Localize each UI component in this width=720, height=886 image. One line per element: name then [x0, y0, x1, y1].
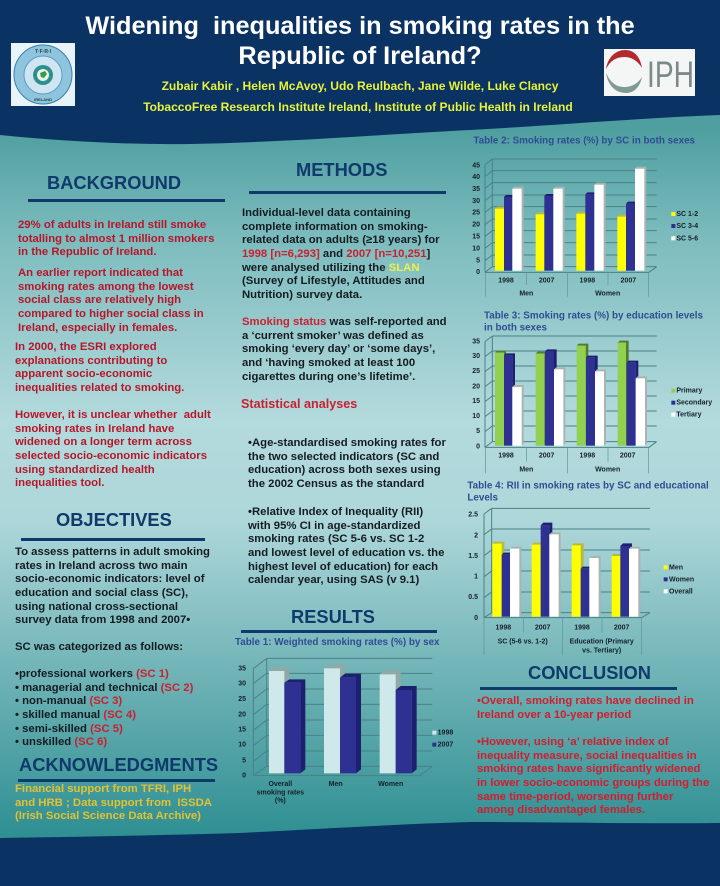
conclusion text: widened inequalities: same time-period, worsening further	[477, 791, 673, 803]
chart: table 1 weighted smoking rates by sex: 0	[242, 773, 246, 780]
chart: table 2 smoking rates by SC: 35	[472, 186, 480, 193]
chart: table 1 weighted smoking rates by sex: Women	[378, 781, 403, 788]
chart: table 2 smoking rates by SC: 25	[472, 210, 480, 217]
social class list	[15, 668, 193, 748]
chart: table 2 smoking rates by SC: 2007	[539, 278, 555, 285]
chart: table 1 weighted smoking rates by sex	[235, 637, 453, 805]
chart: table 2 smoking rates by SC: 5	[476, 257, 480, 264]
chart: table 4 RII in smoking rates: 2007	[614, 624, 630, 631]
chart: table 3 smoking rates by education: Table 3: Smoking rates (%) by education levels	[484, 311, 703, 322]
methods text: age-standardised: •Age-standardised smoking rates for	[248, 437, 446, 449]
chart: table 3 smoking rates by education: 1998	[498, 453, 514, 460]
affiliation: TobaccoFree Research Institute Ireland, Institute of Public Health in Ireland	[143, 100, 573, 114]
chart: table 4 RII in smoking rates: 1998	[496, 624, 511, 631]
title: Republic of Ireland?	[238, 42, 482, 70]
authors: Zubair Kabir , Helen McAvoy, Udo Reulbach, Jane Wilde, Luke Clancy	[162, 79, 558, 93]
chart: table 1 weighted smoking rates by sex: 20	[238, 711, 246, 718]
background text: research gap: widened on a longer term across	[15, 436, 192, 448]
chart: table 3 smoking rates by education: Tertiary	[676, 412, 702, 419]
chart: table 4 RII in smoking rates: Overall	[669, 588, 693, 595]
footer band	[0, 822, 720, 886]
logo: TFRI: T·F·R·I	[35, 49, 52, 55]
conclusion text: widened inequalities	[477, 736, 709, 816]
chart: table 3 smoking rates by education: Women	[595, 467, 620, 474]
methods text: data: Nutrition) survey data.	[242, 289, 362, 301]
social class intro: SC was categorized as follows:	[15, 641, 183, 653]
acknowledgments text: Financial support from TFRI, IPH	[15, 783, 191, 795]
chart: table 1 weighted smoking rates by sex: Men	[329, 781, 343, 788]
chart: table 2 smoking rates by SC	[472, 135, 698, 297]
conclusion text: widened inequalities: inequality measure, social inequalities in	[477, 750, 697, 762]
acknowledgments text: (Irish Social Science Data Archive)	[15, 810, 201, 822]
chart: table 2 smoking rates by SC: 1998	[498, 278, 514, 285]
panel: methods	[241, 159, 447, 586]
background text: earlier report: social class are relatively high	[18, 294, 181, 306]
heading: results: RESULTS	[291, 606, 375, 627]
methods text: relative index: and lowest level of education vs. the	[248, 547, 444, 559]
chart: table 2 smoking rates by SC: SC 5-6	[676, 235, 698, 242]
chart: table 2 smoking rates by SC: 45	[472, 162, 480, 169]
methods text: smoking status	[242, 316, 447, 383]
chart: table 4 RII in smoking rates: 2007	[535, 624, 551, 631]
methods text: age-standardised: education) across both sexes using	[248, 464, 441, 476]
methods text: smoking status: smoking ‘every day’ or ‘some days’,	[242, 343, 435, 355]
chart: table 2 smoking rates by SC: Table 2: Smoking rates (%) by SC in both sexes	[473, 135, 696, 146]
chart: table 1 weighted smoking rates by sex: 2007	[438, 742, 453, 749]
background text: ESRI: In 2000, the ESRI explored	[15, 341, 157, 353]
objectives text: using national cross-sectional	[15, 601, 178, 613]
panel: acknowledgments	[15, 754, 218, 822]
objectives text: education and social class (SC),	[15, 587, 188, 599]
objectives text: rates in Ireland across two main	[15, 560, 188, 572]
methods text: relative index: highest level of education) for each	[248, 561, 438, 573]
chart: table 1 weighted smoking rates by sex: smoking rates	[257, 789, 304, 796]
chart: table 3 smoking rates by education: 1998	[580, 453, 595, 460]
objectives text: To assess patterns in adult smoking	[15, 546, 210, 558]
heading: acknowledgments: ACKNOWLEDGMENTS	[19, 754, 218, 775]
methods text: data: (Survey of Lifestyle, Attitudes and	[242, 275, 425, 287]
chart: table 3 smoking rates by education: Men	[519, 467, 533, 474]
title	[85, 12, 635, 70]
background text: ESRI: inequalities related to smoking.	[15, 382, 184, 394]
chart: table 4 RII in smoking rates: Levels	[467, 493, 499, 504]
conclusion text: widened inequalities: in lower socio-economic groups during the	[477, 777, 709, 789]
conclusion text: widened inequalities: smoking rates have significantly widened	[477, 763, 700, 775]
background text: adults smoking: in the Republic of Ireland.	[18, 246, 156, 258]
chart: table 2 smoking rates by SC: SC 3-4	[676, 223, 698, 230]
panel: conclusion	[477, 662, 709, 816]
chart: table 1 weighted smoking rates by sex: 25	[238, 696, 246, 703]
methods text: relative index	[248, 506, 444, 586]
methods text: data: complete information on smoking-	[242, 221, 428, 233]
chart: table 3 smoking rates by education: 10	[472, 413, 480, 420]
chart: table 2 smoking rates by SC: SC 1-2	[676, 211, 698, 218]
methods text: smoking status: a ‘current smoker’ was defined as	[242, 330, 424, 342]
methods text: relative index: •Relative Index of Inequality (RII)	[248, 506, 423, 518]
chart: table 4 RII in smoking rates: 0.5	[468, 594, 478, 601]
objectives text	[15, 546, 210, 626]
background text: earlier report: compared to higher social class in	[18, 308, 204, 320]
chart: table 4 RII in smoking rates: 1998	[574, 624, 590, 631]
chart: table 3 smoking rates by education: 30	[472, 353, 480, 360]
header band	[0, 0, 720, 144]
chart: table 4 RII in smoking rates: vs. Tertiary)	[582, 648, 621, 655]
chart: table 3 smoking rates by education: Primary	[676, 388, 703, 395]
title: Widening inequalities in smoking rates in the	[85, 12, 635, 40]
objectives text: socio-economic indicators: level of	[15, 573, 204, 585]
chart: table 4 RII in smoking rates: Men	[669, 564, 683, 571]
chart: table 3 smoking rates by education	[472, 311, 712, 474]
chart: table 4 RII in smoking rates: Table 4: RII in smoking rates by SC and educational	[467, 481, 709, 492]
background text: research gap: inequalities tool.	[15, 477, 104, 489]
chart: table 4 RII in smoking rates: 2.5	[468, 512, 478, 519]
chart: table 4 RII in smoking rates: 2	[474, 532, 478, 539]
chart: table 2 smoking rates by SC: 10	[472, 245, 480, 252]
background text: research gap: However, it is unclear whether adult	[15, 409, 211, 421]
heading: background: BACKGROUND	[47, 172, 181, 193]
background text: ESRI: apparent socio-economic	[15, 368, 152, 380]
panel: background	[15, 172, 225, 489]
acknowledgments text: and HRB ; Data support from ISSDA	[15, 797, 212, 809]
chart: table 3 smoking rates by education: Secondary	[676, 400, 712, 407]
chart: table 4 RII in smoking rates: 1	[474, 573, 478, 580]
background text: research gap: smoking rates in Ireland have	[15, 423, 174, 435]
logo: IPH	[604, 49, 695, 96]
background text: ESRI: explanations contributing to	[15, 355, 167, 367]
heading: conclusion: CONCLUSION	[528, 662, 651, 683]
background text: research gap: using standardized health	[15, 464, 155, 476]
background text: research gap	[15, 409, 211, 489]
chart: table 3 smoking rates by education: 5	[476, 428, 480, 435]
social class list: • semi-skilled (SC 5)	[15, 723, 123, 735]
chart: table 4 RII in smoking rates: 0	[474, 615, 478, 622]
chart: table 1 weighted smoking rates by sex: 10	[238, 742, 246, 749]
methods subheading: statistical analyses: Statistical analyses	[241, 397, 357, 411]
methods text: relative index: smoking rates (SC 5-6 vs. SC 1-2	[248, 533, 424, 545]
chart: table 1 weighted smoking rates by sex: Table 1: Weighted smoking rates (%) by sex	[235, 637, 440, 648]
conclusion text: overall decline: •Overall, smoking rates have declined in	[477, 695, 694, 707]
chart: table 3 smoking rates by education: 0	[476, 443, 480, 450]
chart: table 1 weighted smoking rates by sex: Overall	[268, 781, 292, 788]
chart: table 4 RII in smoking rates	[467, 481, 709, 655]
chart: table 2 smoking rates by SC: Men	[519, 290, 533, 297]
chart: table 2 smoking rates by SC: 1998	[580, 278, 595, 285]
chart: table 3 smoking rates by education: 20	[472, 383, 480, 390]
background text: earlier report	[18, 267, 204, 334]
chart: table 3 smoking rates by education: 2007	[539, 453, 555, 460]
chart: table 1 weighted smoking rates by sex: 30	[238, 681, 246, 688]
chart: table 4 RII in smoking rates: Women	[669, 576, 694, 583]
chart: table 1 weighted smoking rates by sex: 35	[238, 666, 246, 673]
panel: results and table 1	[235, 606, 453, 805]
heading: methods: METHODS	[296, 159, 387, 180]
background text: adults smoking: totalling to almost 1 million smokers	[18, 233, 214, 245]
social class list: • skilled manual (SC 4)	[15, 709, 136, 721]
methods text: data: related data on adults (≥18 years) for	[242, 234, 440, 246]
methods text: age-standardised: the 2002 Census as the standard	[248, 478, 424, 490]
methods text: relative index: with 95% CI in age-standardized	[248, 520, 420, 532]
methods text: data: 1998 [n=6,293] and 2007 [n=10,251]	[242, 248, 430, 260]
conclusion text: widened inequalities: •However, using ‘a’ relative index of	[477, 736, 669, 748]
conclusion text: overall decline: Ireland over a 10-year period	[477, 709, 631, 721]
acknowledgments text	[15, 783, 212, 822]
methods text: relative index: calendar year, using SAS (v 9.1)	[248, 574, 419, 586]
methods text: data	[242, 207, 440, 301]
background text: ESRI	[15, 341, 184, 394]
methods text: age-standardised: the two selected indicators (SC and	[248, 451, 439, 463]
methods text: age-standardised	[248, 437, 446, 490]
chart: table 2 smoking rates by SC: 0	[476, 269, 480, 276]
chart: table 2 smoking rates by SC: 15	[472, 233, 480, 240]
chart: table 1 weighted smoking rates by sex: 5	[242, 757, 246, 764]
chart: table 2 smoking rates by SC: 2007	[621, 278, 636, 285]
methods text: data: were analysed utilizing the SLAN	[242, 262, 420, 274]
chart: table 1 weighted smoking rates by sex: 1998	[438, 730, 453, 737]
background text: adults smoking	[18, 219, 214, 258]
logo: TFRI	[11, 43, 75, 106]
methods text: smoking status: cigarettes during one’s lifetime’.	[242, 371, 415, 383]
background text: earlier report: smoking rates among the lowest	[18, 281, 194, 293]
heading: objectives: OBJECTIVES	[56, 509, 172, 530]
social class list: •professional workers (SC 1)	[15, 668, 169, 680]
panel: objectives	[15, 509, 210, 748]
social class list: • unskilled (SC 6)	[15, 736, 107, 748]
chart: table 2 smoking rates by SC: 20	[472, 222, 480, 229]
background text: earlier report: Ireland, especially in females.	[18, 322, 177, 334]
chart: table 3 smoking rates by education: in both sexes	[484, 323, 548, 334]
background text: earlier report: An earlier report indicated that	[18, 267, 183, 279]
chart: table 3 smoking rates by education: 15	[472, 398, 480, 405]
methods text: smoking status: Smoking status was self-reported and	[242, 316, 447, 328]
chart: table 1 weighted smoking rates by sex: 15	[238, 727, 246, 734]
chart: table 4 RII in smoking rates: SC (5-6 vs. 1-2)	[498, 639, 548, 646]
background text: adults smoking: 29% of adults in Ireland still smoke	[18, 219, 206, 231]
methods text: smoking status: and ‘having smoked at least 100	[242, 357, 415, 369]
chart: table 2 smoking rates by SC: 40	[472, 174, 480, 181]
objectives text: survey data from 1998 and 2007•	[15, 614, 190, 626]
chart: table 3 smoking rates by education: 2007	[620, 453, 636, 460]
methods text: data: Individual-level data containing	[242, 207, 411, 219]
conclusion text: widened inequalities: among disadvantaged females.	[477, 804, 645, 816]
chart: table 4 RII in smoking rates: Education (Primary	[570, 639, 634, 646]
conclusion text: overall decline	[477, 695, 694, 721]
logo: TFRI: IRELAND	[34, 97, 52, 102]
social class list: • managerial and technical (SC 2)	[15, 682, 193, 694]
social class list: • non-manual (SC 3)	[15, 695, 122, 707]
chart: table 2 smoking rates by SC: 30	[472, 198, 480, 205]
chart: table 3 smoking rates by education: 25	[472, 368, 480, 375]
chart: table 2 smoking rates by SC: Women	[595, 290, 620, 297]
background text: research gap: selected socio-economic indicators	[15, 450, 207, 462]
chart: table 1 weighted smoking rates by sex: (%)	[275, 798, 286, 805]
chart: table 4 RII in smoking rates: 1.5	[468, 553, 478, 560]
chart: table 3 smoking rates by education: 35	[472, 338, 480, 345]
